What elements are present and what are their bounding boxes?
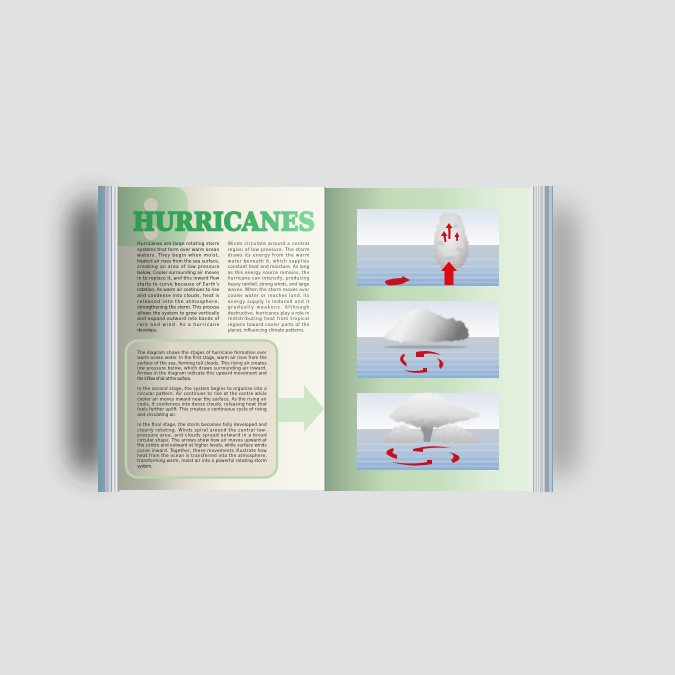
small rising arrows: [441, 223, 459, 242]
tall cloud: [434, 212, 468, 270]
intro text right column: regions toward cooler parts of the: [228, 322, 310, 328]
description text: clearly rotating. Winds spiral around the central low-: [137, 427, 267, 432]
description text: heat from the ocean is transferred into the atmosphere,: [137, 453, 267, 458]
intro text left column: creating an area of low pressure: [137, 264, 220, 270]
intro text right column: planet, influencing climate patterns.: [228, 328, 305, 334]
intro text left column: rain and wind. As a hurricane: [137, 322, 220, 328]
rotation arrows: [386, 446, 460, 466]
intro text left column: [137, 241, 220, 334]
description text: fuels further uplift. This creates a continuous cycle of rising: [137, 407, 267, 412]
left page stack: [98, 186, 120, 492]
right page: [325, 188, 531, 491]
stage 3 illustration: [357, 393, 499, 470]
large up arrow: [441, 262, 457, 285]
cloud shadow on sea: [384, 345, 468, 349]
spine shadow: [324, 187, 326, 491]
intro text left column: strengthening the storm. This process: [137, 305, 220, 311]
mature hurricane cloud: [384, 393, 480, 443]
intro text right column: energy supply is reduced and it: [228, 299, 310, 305]
description panel: [126, 340, 277, 478]
description text: transforming warm, moist air into a powerful rotating storm: [137, 458, 267, 463]
description text: Arrows in the diagram indicate this upward movement and: [137, 371, 267, 376]
description text: the centre and outward at higher levels, while surface winds: [137, 443, 267, 448]
description text: surface of the sea, forming tall clouds. This rising air creates: [137, 360, 267, 365]
intro text left column: Hurricanes are large rotating storm: [137, 241, 219, 247]
description text: In the second stage, the system begins to organise into a: [137, 386, 267, 391]
intro text left column: rotation. As warm air continues to rise: [137, 287, 220, 293]
storm cloud: [383, 308, 469, 342]
description text: pressure area, and clouds spread outward in a broad: [137, 432, 267, 437]
intro text right column: gradually weakens. Although: [228, 305, 310, 311]
rotation arrows: [400, 351, 443, 373]
decorative pale circles: [144, 198, 158, 240]
description text: circular pattern. Air continues to rise at the centre while: [137, 391, 267, 396]
description text: curve inward. Together, these movements illustrate how: [137, 448, 267, 453]
description text: circular shape. The arrows show how air moves upward at: [137, 438, 267, 443]
right book shadow: [550, 200, 574, 482]
intro text left column: in to replace it, and this inward flow: [137, 276, 220, 282]
description text: In the final stage, the storm becomes fully developed and: [137, 422, 267, 427]
intro text right column: cooler water or reaches land, its: [228, 293, 310, 299]
intro text left column: and expand outward into bands of: [137, 316, 220, 322]
intro text right column: region of low pressure. The storm: [228, 247, 309, 253]
left page: [118, 187, 325, 490]
title: HURRICANES: [133, 208, 315, 238]
intro text right column: hurricane can intensify, producing: [228, 276, 310, 282]
intro text left column: and condense into clouds, heat is: [137, 293, 220, 299]
intro text left column: heated air rises from the sea surface,: [137, 258, 219, 264]
stage 2 illustration: [357, 301, 499, 378]
right page stack: [531, 186, 553, 492]
surface inflow arrow: [385, 276, 410, 285]
intro text right column: Winds circulate around a central: [228, 241, 309, 247]
description text: cools, it condenses into dense clouds, releasing heat that: [137, 402, 267, 406]
description text: low pressure below, which draws surrounding air inward.: [137, 366, 267, 370]
intro text left column: waters. They begin when moist,: [137, 253, 219, 259]
intro text right column: as this energy source remains, the: [228, 270, 310, 276]
decorative green blob behind title: [118, 187, 188, 246]
intro text right column: water beneath it, which supplies: [228, 258, 310, 264]
intro text right column: redistributing heat from tropical: [228, 316, 309, 322]
intro text right column: constant heat and moisture. As long: [228, 264, 310, 270]
intro text right column: [228, 241, 310, 334]
intro text left column: develops.: [137, 328, 157, 334]
intro text left column: starts to curve because of Earth's: [137, 282, 220, 288]
intro text right column: draws its energy from the warm: [228, 253, 309, 259]
stage 1 illustration: [357, 209, 499, 286]
description text: system.: [137, 463, 152, 468]
intro text right column: destructive, hurricanes play a role in: [228, 310, 310, 316]
callout arrow: [276, 385, 324, 432]
intro text right column: heavy rainfall, strong winds, and large: [228, 282, 310, 288]
description text: and circulating air.: [137, 412, 176, 417]
description text: cooler air moves inward near the surface. As the rising air: [137, 396, 267, 401]
description text: [136, 350, 267, 468]
description text: warm ocean water. In the first stage, warm air rises from the: [137, 355, 267, 360]
left book shadow: [74, 194, 100, 478]
intro text left column: allows the system to grow vertically: [137, 310, 220, 316]
intro text left column: below. Cooler surrounding air moves: [137, 270, 220, 276]
description text: The diagram shows the stages of hurricane formation over: [136, 350, 267, 355]
intro text right column: waves. When the storm moves over: [228, 287, 310, 293]
description text: the inflow of air at the surface.: [137, 376, 191, 381]
intro text left column: systems that form over warm ocean: [137, 247, 220, 253]
intro text left column: released into the atmosphere,: [137, 299, 219, 305]
